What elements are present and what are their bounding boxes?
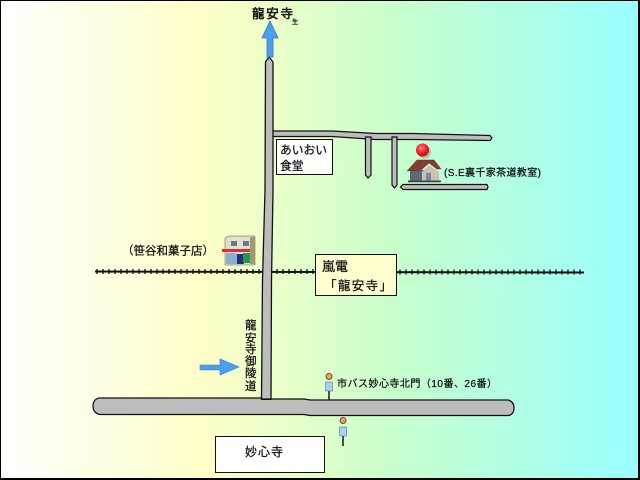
- label: S.E裏千家茶道教室: (S.E裏千家茶道教室): [444, 166, 541, 179]
- icon: bus stop 2: [340, 418, 346, 446]
- label: bus stop: 市バス妙心寺北門（10番、26番）: [337, 377, 497, 390]
- label: 龍安寺御陵道 (vertical): [245, 318, 257, 393]
- icon: house: [407, 160, 441, 182]
- label box: 嵐電 龍安寺: [316, 254, 396, 296]
- railway line: [95, 269, 584, 274]
- marker: red ball: [416, 144, 431, 158]
- road: side road east: [272, 131, 492, 140]
- label: 龍安寺御陵道 (vertical): 安: [245, 332, 256, 345]
- label: 笹谷和菓子店: （笹谷和菓子店）: [122, 244, 214, 258]
- arrow: toward road: [200, 359, 239, 375]
- road: branch 1: [366, 137, 371, 178]
- icon: bus stop 1: [326, 374, 332, 400]
- label: 龍安寺御陵道 (vertical): 御: [245, 354, 256, 368]
- road: branch 2: [392, 137, 397, 188]
- label box: 妙心寺: [216, 436, 324, 472]
- icon: shop: [222, 236, 255, 265]
- road: main north-south: [262, 57, 273, 399]
- road: main east-west: [93, 398, 514, 416]
- label box: あいおい食堂: 食堂: [280, 160, 304, 173]
- label box: 嵐電 龍安寺: 嵐電: [322, 259, 348, 274]
- label: 龍安寺御陵道 (vertical): 道: [245, 379, 257, 393]
- title: 龍安寺: 龍安寺: [252, 7, 293, 21]
- label box: 妙心寺: 妙心寺: [245, 445, 283, 459]
- label: 龍安寺御陵道 (vertical): 龍: [245, 318, 257, 332]
- label: 龍安寺御陵道 (vertical): 寺: [245, 343, 256, 356]
- small mark: 生: [292, 18, 298, 26]
- label box: 嵐電 龍安寺: 「龍安寺」: [324, 279, 392, 293]
- label box: あいおい食堂: あいおい: [280, 144, 327, 157]
- label: 龍安寺御陵道 (vertical): 陵: [245, 367, 257, 380]
- arrow: north: [262, 21, 278, 57]
- road: lower side road: [400, 184, 488, 190]
- label box: あいおい食堂: [276, 140, 332, 174]
